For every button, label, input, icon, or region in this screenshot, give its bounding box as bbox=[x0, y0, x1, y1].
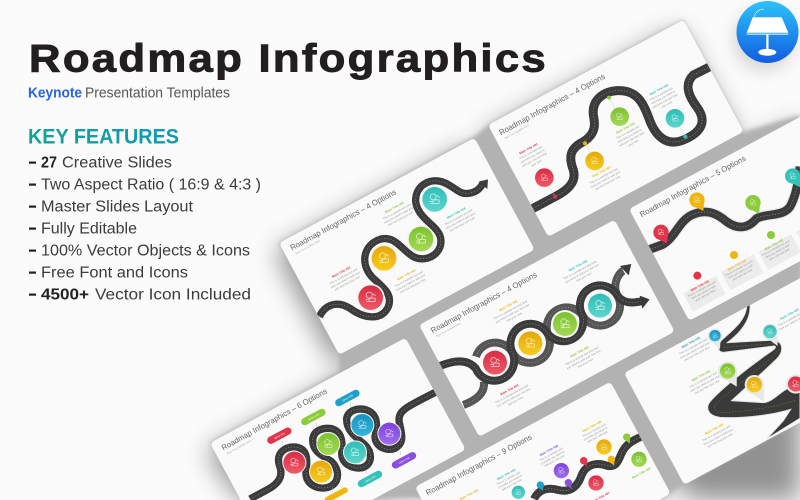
text blocks: This is a sample text and here bbox=[563, 259, 598, 281]
option boxes: your own text that bbox=[694, 288, 716, 303]
text blocks: This is a sample text and bbox=[702, 424, 731, 442]
road: lighter strand bbox=[463, 264, 631, 405]
map pins bbox=[653, 168, 800, 244]
feature list: 4500+ bbox=[41, 287, 89, 304]
text blocks: add your own text bbox=[587, 430, 608, 444]
option boxes: Main Title #02 bbox=[727, 258, 747, 272]
slide heading: Type Your Subtitle Here bbox=[435, 321, 462, 338]
text blocks bbox=[515, 81, 680, 193]
text blocks: add your own text that bbox=[652, 92, 678, 109]
text blocks: This is a sample text and bbox=[329, 267, 358, 285]
slide heading: Roadmap Infographics – 9 Options bbox=[424, 433, 533, 497]
milestones bbox=[282, 413, 401, 484]
option boxes: here you need to add bbox=[691, 284, 716, 300]
text blocks: here you need to add your bbox=[679, 340, 710, 360]
text blocks: Main Title #02 bbox=[704, 422, 724, 436]
slide heading: Roadmap Infographics – 4 Options bbox=[289, 188, 398, 252]
feature list: Master Slides Layout bbox=[41, 199, 194, 216]
text blocks: This is a sample text and bbox=[444, 208, 473, 226]
text blocks: you need to add your own text bbox=[495, 303, 530, 324]
milestones bbox=[512, 439, 647, 499]
feature list: Free Font and Icons bbox=[41, 265, 188, 282]
text blocks: own text that your own bbox=[594, 174, 621, 191]
text blocks: here you need to add your bbox=[590, 170, 621, 189]
panel: slide 4 options left bbox=[280, 139, 534, 354]
text blocks: that your own bbox=[577, 357, 594, 369]
subtitle: Presentation Templates bbox=[85, 86, 230, 102]
text blocks: provides you need to bbox=[583, 425, 609, 441]
text blocks: own text that your own bbox=[399, 277, 426, 294]
text blocks: This is a sample text bbox=[615, 124, 640, 140]
option pills: Option #04 bbox=[364, 475, 377, 484]
option boxes: your own text that bbox=[768, 247, 790, 262]
text blocks: Main Title #06 bbox=[539, 444, 559, 457]
text blocks: Main Title #01 bbox=[499, 383, 520, 396]
text blocks: your own bbox=[530, 158, 543, 168]
text blocks: add your own text bbox=[501, 478, 523, 492]
text blocks: here you need to add your bbox=[330, 270, 361, 289]
text blocks: and here you need to bbox=[617, 127, 643, 144]
option boxes: Main Title #01 bbox=[690, 279, 710, 292]
text blocks: This is a sample and bbox=[539, 446, 564, 462]
option boxes: here you need to add bbox=[765, 243, 790, 259]
text blocks: This is a sample text bbox=[649, 86, 674, 102]
text blocks: This is a sample and bbox=[496, 470, 521, 486]
milestones bbox=[535, 96, 687, 199]
text blocks: This is a sample text and bbox=[678, 337, 708, 356]
text blocks: you need to add your own text bbox=[496, 387, 531, 408]
text blocks: and here you need to bbox=[520, 148, 546, 164]
text blocks: Main Title #02 bbox=[396, 268, 417, 281]
option pills: Option #01 bbox=[274, 432, 286, 440]
option pills: Option #06 bbox=[398, 456, 411, 465]
road with arrow bbox=[319, 179, 488, 317]
option pills: Option #05 bbox=[342, 394, 354, 403]
text blocks: and here you need to bbox=[650, 89, 676, 106]
text blocks: This is a sample text and bbox=[382, 202, 412, 221]
feature list: 27 bbox=[41, 155, 57, 172]
text blocks: your own bbox=[661, 100, 673, 109]
panel: slide 9 options bbox=[416, 383, 670, 500]
text blocks: Main Title #04 bbox=[649, 83, 669, 96]
text blocks: own text that your own bbox=[693, 378, 721, 395]
text blocks: here you need to add your bbox=[383, 205, 414, 225]
option boxes: here you need to add bbox=[728, 263, 753, 280]
text blocks: add your own text that bbox=[521, 151, 548, 168]
text blocks: add your own text that bbox=[618, 131, 645, 148]
option boxes: This is a sample text and bbox=[687, 280, 717, 298]
text blocks: provides you need to bbox=[497, 473, 523, 489]
text blocks: Main Title #03 bbox=[569, 345, 590, 358]
text blocks: own text that your own bbox=[707, 432, 734, 449]
option pills: Option #03 bbox=[308, 413, 320, 422]
option pills bbox=[266, 388, 417, 500]
text blocks: Main Title #05 bbox=[681, 336, 701, 349]
text blocks: This is a sample text and here bbox=[564, 345, 600, 367]
text blocks: This is a sample text and here bbox=[493, 299, 528, 321]
milestones bbox=[481, 292, 614, 377]
text blocks: that your own bbox=[575, 271, 593, 283]
option boxes bbox=[683, 214, 800, 312]
text blocks: Main Title #03 bbox=[615, 121, 636, 135]
road bbox=[530, 65, 713, 210]
panel: slide perspective road bbox=[625, 278, 800, 484]
slide heading: Type Your Subtitle Here bbox=[226, 438, 252, 456]
text blocks: here you need to add your bbox=[395, 273, 426, 292]
option boxes: your own text that bbox=[731, 268, 753, 282]
feature list: 100% Vector Objects & Icons bbox=[41, 243, 250, 260]
feature list bbox=[29, 155, 261, 304]
text blocks: own text that your own bbox=[334, 275, 361, 292]
subtitle bbox=[28, 86, 230, 102]
road bbox=[643, 167, 800, 252]
icon: keynote lectern bbox=[736, 1, 798, 63]
text blocks: Main Title #01 bbox=[518, 142, 539, 155]
feature list: Vector Icon Included bbox=[95, 287, 251, 304]
milestones bbox=[357, 185, 449, 312]
map pins bbox=[708, 324, 800, 402]
feature list: Creative Slides bbox=[62, 155, 172, 172]
text blocks: here you need to add your bbox=[445, 211, 476, 230]
text blocks: Main Title #04 bbox=[779, 307, 800, 321]
slide heading: Roadmap Infographics – 4 Options bbox=[429, 270, 538, 335]
text blocks: that your own bbox=[506, 311, 523, 323]
text blocks: you need to add your own text bbox=[566, 349, 601, 370]
text blocks: here you need to add your bbox=[703, 427, 734, 446]
text blocks bbox=[459, 418, 651, 500]
panel: slide 4 options top bbox=[489, 21, 742, 236]
heading: key features: KEY FEATURES bbox=[28, 126, 179, 148]
winding road bbox=[708, 304, 800, 439]
text blocks: This is a sample and bbox=[582, 422, 607, 438]
text blocks: own text that your own bbox=[387, 210, 414, 227]
text blocks: add your own text bbox=[544, 454, 565, 468]
text blocks: Main Title #01 bbox=[331, 265, 351, 279]
slide heading: Roadmap Infographics – 6 Options bbox=[220, 387, 329, 452]
text blocks: your own bbox=[627, 138, 640, 147]
text blocks bbox=[326, 198, 478, 296]
road: dark strand bbox=[440, 285, 650, 381]
feature list: Two Aspect Ratio ( 16:9 & 4:3 ) bbox=[41, 177, 261, 194]
slide heading: Roadmap Infographics – 4 Options bbox=[498, 72, 607, 137]
subtitle: Keynote bbox=[28, 86, 82, 102]
text blocks: This is a sample text and here bbox=[494, 383, 530, 405]
text blocks: you need to add your own text bbox=[564, 263, 600, 284]
text blocks: Main Title #04 bbox=[446, 206, 466, 220]
feature list: Fully Editable bbox=[41, 221, 137, 238]
text blocks: Main Title #02 bbox=[498, 299, 518, 312]
text blocks: Main Title #08 bbox=[582, 420, 602, 433]
map pins bbox=[537, 433, 630, 491]
text blocks: own text that your own bbox=[683, 345, 711, 362]
text blocks: that your own bbox=[507, 395, 524, 407]
road bbox=[534, 432, 653, 499]
text blocks bbox=[675, 305, 800, 450]
panel: slide 6 options bbox=[205, 330, 470, 500]
text blocks bbox=[491, 255, 603, 412]
text blocks: provides you need to bbox=[540, 449, 566, 465]
text blocks: own text that your own bbox=[449, 216, 476, 233]
option boxes: This is a sample text and bbox=[724, 259, 754, 278]
slide heading: Type Your Subtitle Here bbox=[503, 123, 530, 140]
text blocks: here you need to add your bbox=[689, 374, 720, 393]
title: Roadmap Infographics bbox=[29, 38, 548, 81]
option boxes: This is a sample text and bbox=[761, 239, 791, 257]
text blocks: Main Title #04 bbox=[496, 468, 516, 481]
text blocks: Main Title #02 bbox=[591, 165, 612, 178]
text blocks: Main Title #03 bbox=[691, 369, 711, 382]
text blocks: Main Title #03 bbox=[384, 201, 405, 214]
text blocks: This is a sample text and bbox=[688, 371, 718, 389]
option boxes: Main Title #03 bbox=[764, 238, 784, 251]
slide heading: Type Your Subtitle Here bbox=[294, 239, 321, 256]
road centre line bbox=[715, 343, 797, 413]
text blocks: Main Title #04 bbox=[568, 259, 588, 272]
text blocks: Main Title #09 bbox=[631, 466, 651, 480]
text blocks: This is a sample text bbox=[518, 145, 543, 160]
text blocks: This is a sample text and bbox=[394, 270, 424, 288]
slide heading: Roadmap Infographics – 5 Options bbox=[638, 154, 747, 219]
road bbox=[250, 388, 443, 499]
text blocks: This is a sample text and bbox=[589, 167, 619, 185]
panel: slide 5 options bbox=[630, 117, 800, 320]
panel: slide 4 options center bbox=[420, 221, 674, 436]
